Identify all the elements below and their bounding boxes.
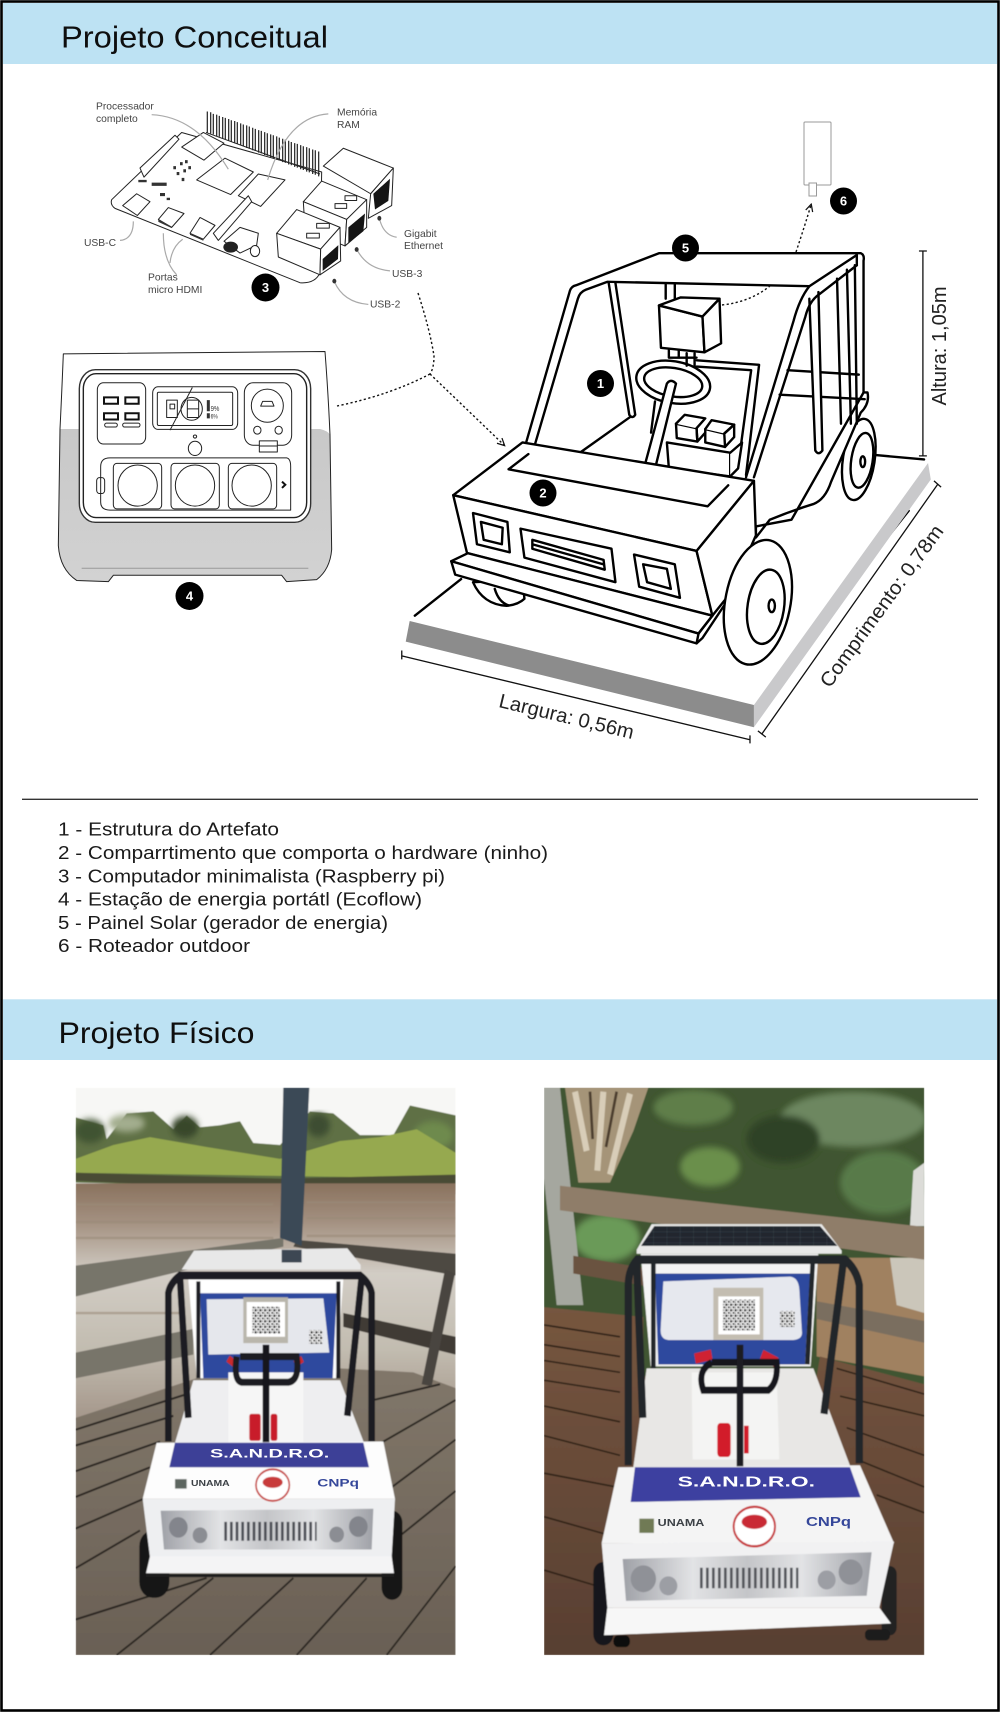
river and bank (817, 1258, 924, 1376)
steering wheel (634, 356, 713, 464)
section band: Projeto Físico (3, 999, 997, 1060)
router box on frame (659, 297, 721, 352)
badge 1: 1 (597, 376, 604, 391)
text block: numbered legend (58, 818, 548, 956)
wooden posts and rails (544, 1088, 583, 1305)
diagram: Ecoflow portable power station: 9% (211, 406, 219, 413)
badge 6: 6 (840, 194, 847, 208)
text block: numbered legend: 5 - Painel Solar (gerador de energia) (58, 912, 388, 933)
wheels (593, 1562, 613, 1645)
power station body (58, 429, 332, 582)
GPIO pins (207, 112, 319, 176)
railing (76, 1238, 283, 1296)
label: USB-3: USB-3 (392, 269, 423, 280)
label: Processador completo: completo (96, 114, 138, 125)
front compartment (602, 1465, 894, 1543)
pipes (628, 1260, 859, 1465)
label: USB-2: USB-2 (370, 300, 401, 310)
dimension lines (402, 251, 941, 743)
front compartment (143, 1442, 395, 1499)
badge 2 (530, 480, 556, 506)
wheels (139, 1531, 169, 1598)
label: Processador completo: Processador (96, 102, 154, 112)
badge 3: 3 (262, 280, 269, 295)
section band: Projeto Conceitual (3, 3, 997, 64)
USB ports group (97, 383, 146, 444)
photo: robot on river pier (75, 1088, 456, 1655)
processor (197, 158, 253, 195)
heading: Projeto Físico: Projeto Físico (58, 1017, 254, 1050)
steering (230, 1359, 300, 1364)
text block: numbered legend: 6 - Roteador outdoor (58, 935, 250, 956)
diagram: Ecoflow portable power station: 6% (211, 414, 218, 420)
logo text: CNPq: CNPq (806, 1515, 851, 1529)
front wheel (714, 532, 802, 672)
ethernet block (323, 148, 393, 194)
logo text: CNPq: CNPq (317, 1478, 359, 1490)
left front wheel (473, 580, 524, 606)
hardware boxes (667, 415, 742, 476)
label: Gigabit Ethernet: Ethernet (404, 241, 443, 252)
label: Comprimento: Comprimento: 0,78m (816, 521, 948, 692)
pier deck (76, 1368, 456, 1655)
text block: numbered legend: 4 - Estação de energia portátl (Ecoflow) (58, 889, 422, 910)
pillar (280, 1088, 309, 1246)
badge 1 (587, 370, 614, 397)
QR box (713, 1288, 763, 1340)
power button (193, 435, 197, 438)
tree trunk (565, 1088, 648, 1183)
badge 6 (830, 188, 857, 214)
logo text: UNAMA: UNAMA (191, 1479, 230, 1488)
floor platform (633, 1368, 851, 1467)
text block: numbered legend: 1 - Estrutura do Artefato (58, 818, 279, 840)
interior floor (580, 415, 633, 453)
badge 4 (176, 582, 204, 610)
arrow: solar panel to router (722, 205, 811, 305)
rear sign (641, 1254, 818, 1366)
label: Portas micro HDMI: Portas (148, 272, 178, 284)
router antenna device (804, 122, 831, 196)
rear wheel (837, 416, 881, 503)
headlights and grille (473, 513, 680, 598)
wifi module (182, 132, 224, 160)
badge 3 (252, 274, 280, 302)
photo: robot with solar panel (544, 1088, 927, 1655)
micro HDMI ports (158, 208, 184, 227)
label: Memória RAM: Memória (337, 108, 377, 118)
display (153, 387, 238, 429)
outlets row (101, 458, 291, 510)
floor platform (175, 1380, 364, 1443)
USB-3 block (303, 181, 367, 219)
pipes (168, 1275, 372, 1442)
display connector (140, 135, 179, 177)
solar panel (182, 1248, 361, 1270)
seat back (697, 360, 759, 475)
board (111, 132, 322, 283)
base left side (406, 621, 754, 727)
diagram: Raspberry Pi computer (84, 102, 443, 310)
badge 5 (672, 234, 699, 262)
sign text: S.A.N.D.R.O.: S.A.N.D.R.O. (678, 1474, 815, 1490)
router mount tubes (666, 284, 697, 366)
roof frame (526, 253, 864, 477)
bumper (451, 553, 732, 643)
sign text: S.A.N.D.R.O.: S.A.N.D.R.O. (210, 1448, 329, 1461)
label: Largura: Largura: 0,56m (497, 690, 636, 744)
camera connector (213, 196, 252, 240)
label: Memória RAM: RAM (337, 120, 360, 131)
diagram: Ecoflow portable power station (58, 352, 332, 582)
round AC port (244, 383, 292, 445)
rear crossbars (780, 370, 865, 399)
deck (544, 1307, 924, 1655)
rear sign (188, 1279, 343, 1378)
text block: numbered legend: 3 - Computador minimalista (Raspberry pi) (58, 865, 445, 886)
USB-C port (123, 194, 150, 215)
badge 2: 2 (539, 486, 547, 500)
water (76, 1183, 456, 1421)
label: Altura: Altura: 1,05m (929, 286, 951, 406)
hood (453, 442, 756, 616)
memory chip (238, 174, 285, 206)
rear fender (756, 392, 868, 538)
foliage (573, 1090, 927, 1262)
logo text: UNAMA: UNAMA (658, 1517, 705, 1529)
audio jack (224, 227, 258, 253)
front panel (79, 370, 311, 522)
steering (695, 1355, 777, 1362)
label: Portas micro HDMI: micro HDMI (148, 285, 202, 296)
base right side (754, 463, 931, 727)
diagram: artifact vehicle on base (402, 251, 941, 743)
leader lines (152, 115, 228, 169)
connector arrows: components to compartment (337, 293, 504, 445)
badge 5: 5 (682, 240, 689, 256)
text block: numbered legend: 2 - Comparrtimento que comporta o hardware (ninho) (58, 842, 548, 863)
USB-2 block (277, 210, 340, 249)
solar panel (637, 1224, 842, 1254)
tree line (76, 1105, 456, 1190)
badge 4: 4 (186, 588, 194, 604)
label: Gigabit Ethernet: Gigabit (404, 229, 437, 240)
QR box (243, 1297, 288, 1343)
base top lines (415, 455, 924, 658)
label: USB-C: USB-C (84, 238, 117, 249)
heading: Projeto Conceitual: Projeto Conceitual (61, 20, 328, 54)
